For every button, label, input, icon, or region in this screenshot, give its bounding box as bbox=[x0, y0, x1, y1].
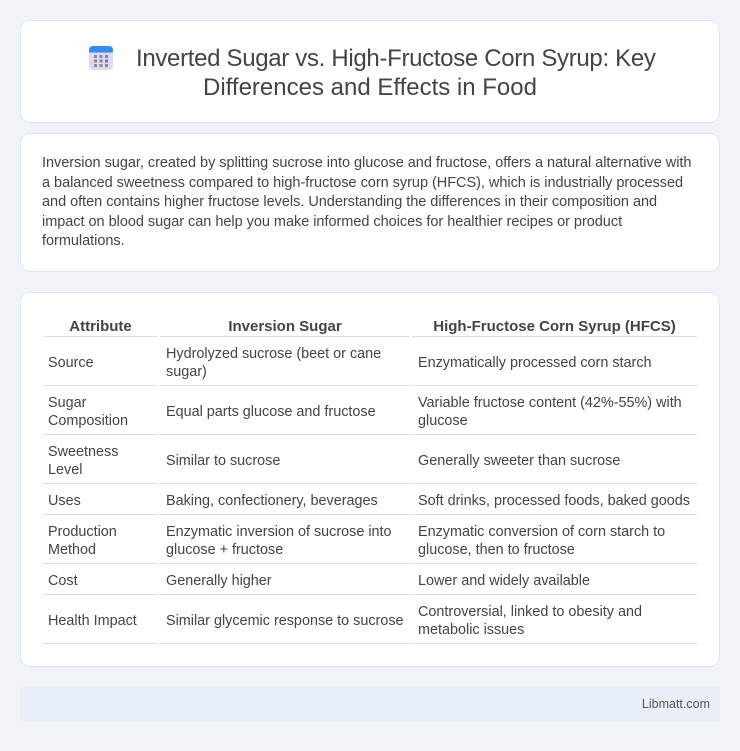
row: uses: Baking, confectionery, beverages bbox=[166, 493, 378, 509]
row: source: Source bbox=[48, 355, 94, 371]
panel: header bbox=[20, 20, 720, 123]
row: health impact: Health Impact bbox=[48, 613, 137, 629]
intro text: formulations. bbox=[42, 233, 125, 249]
row: health impact bbox=[48, 604, 642, 638]
table header row: Inversion Sugar bbox=[228, 318, 342, 335]
row: cost: Lower and widely available bbox=[418, 573, 590, 589]
row: production method: Enzymatic conversion of corn starch to bbox=[418, 524, 665, 540]
intro text: and often contains higher fructose levels. Understanding the differences in their composition and bbox=[42, 194, 657, 210]
row: cost: Generally higher bbox=[166, 573, 272, 589]
row: production method bbox=[48, 524, 665, 558]
row: production method: Enzymatic inversion of sucrose into bbox=[166, 524, 392, 540]
row: uses: Soft drinks, processed foods, baked goods bbox=[418, 493, 690, 509]
row: sugar composition: Composition bbox=[48, 413, 128, 429]
row: sugar composition: Variable fructose content (42%-55%) with bbox=[418, 395, 682, 411]
row: sweetness level: Similar to sucrose bbox=[166, 453, 280, 469]
footer text: Libmatt.com bbox=[642, 697, 710, 711]
row: cost: Cost bbox=[48, 573, 78, 589]
intro text bbox=[42, 155, 691, 249]
row: cost bbox=[48, 573, 590, 589]
panel: comparison table bbox=[20, 292, 720, 667]
row: sugar composition: glucose bbox=[418, 413, 468, 429]
row: uses: Uses bbox=[48, 493, 81, 509]
footer bar bbox=[20, 687, 720, 721]
row: source bbox=[48, 346, 652, 380]
row: sweetness level: Generally sweeter than sucrose bbox=[418, 453, 620, 469]
row: source: sugar) bbox=[166, 364, 207, 380]
row: sugar composition: Sugar bbox=[48, 395, 86, 411]
row: source: Enzymatically processed corn starch bbox=[418, 355, 652, 371]
row: health impact: Controversial, linked to obesity and bbox=[418, 604, 642, 620]
row: production method: glucose + fructose bbox=[166, 542, 283, 558]
row: sweetness level bbox=[48, 444, 620, 478]
intro text: impact on blood sugar can help you make informed choices for healthier recipes or product bbox=[42, 214, 622, 230]
intro text: Inversion sugar, created by splitting sucrose into glucose and fructose, offers a natural alternative with bbox=[42, 155, 691, 171]
intro text: a balanced sweetness compared to high-fructose corn syrup (HFCS), which is industrially processed bbox=[42, 174, 683, 190]
row: sweetness level: Level bbox=[48, 462, 82, 478]
row: sugar composition bbox=[48, 395, 682, 429]
table header row bbox=[69, 318, 676, 335]
title: Differences and Effects in Food bbox=[203, 74, 537, 101]
title: Inverted Sugar vs. High-Fructose Corn Syrup: Key bbox=[136, 45, 656, 72]
row: uses bbox=[48, 493, 690, 509]
row: production method: glucose, then to fructose bbox=[418, 542, 575, 558]
row: sweetness level: Sweetness bbox=[48, 444, 118, 460]
table header row: High-Fructose Corn Syrup (HFCS) bbox=[433, 318, 676, 335]
row: source: Hydrolyzed sucrose (beet or cane bbox=[166, 346, 381, 362]
row: health impact: Similar glycemic response to sucrose bbox=[166, 613, 404, 629]
row: health impact: metabolic issues bbox=[418, 622, 524, 638]
row: production method: Method bbox=[48, 542, 96, 558]
row: production method: Production bbox=[48, 524, 117, 540]
icon: calendar bbox=[89, 46, 113, 70]
table header row: Attribute bbox=[69, 318, 132, 335]
panel: intro bbox=[20, 133, 720, 272]
row: sugar composition: Equal parts glucose and fructose bbox=[166, 404, 376, 420]
title bbox=[136, 45, 656, 101]
